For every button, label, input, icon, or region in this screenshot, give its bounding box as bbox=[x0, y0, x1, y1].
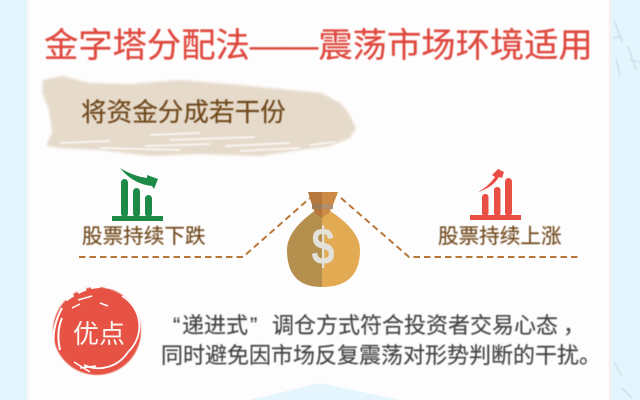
body text: 递进式 bbox=[182, 313, 248, 338]
subheading: 将资金分成若干份 bbox=[81, 98, 286, 127]
body text: ” bbox=[250, 313, 257, 338]
icon: rising stocks chart bbox=[470, 169, 521, 220]
body text bbox=[161, 313, 601, 368]
label: stocks rise: 股票持续上涨 bbox=[438, 225, 562, 248]
body text: ， bbox=[563, 313, 585, 338]
body text: 调仓方式符合投资者交易心态 bbox=[272, 313, 558, 338]
brush stroke banner bbox=[42, 76, 356, 156]
dollar sign: $ bbox=[311, 217, 335, 275]
title: 金字塔分配法——震荡市场环境适用 bbox=[44, 27, 593, 65]
icon: falling stocks chart bbox=[112, 168, 163, 221]
icon: money bag bbox=[287, 192, 360, 287]
badge: advantages stamp bbox=[53, 286, 141, 375]
label: stocks fall: 股票持续下跌 bbox=[82, 225, 206, 248]
dashed line: right bbox=[341, 198, 580, 257]
badge text: 优点 bbox=[73, 319, 125, 349]
body text: 同时避免因市场反复震荡对形势判断的干扰。 bbox=[161, 343, 601, 368]
dashed line: left bbox=[79, 198, 310, 257]
body text: “ bbox=[173, 313, 180, 338]
